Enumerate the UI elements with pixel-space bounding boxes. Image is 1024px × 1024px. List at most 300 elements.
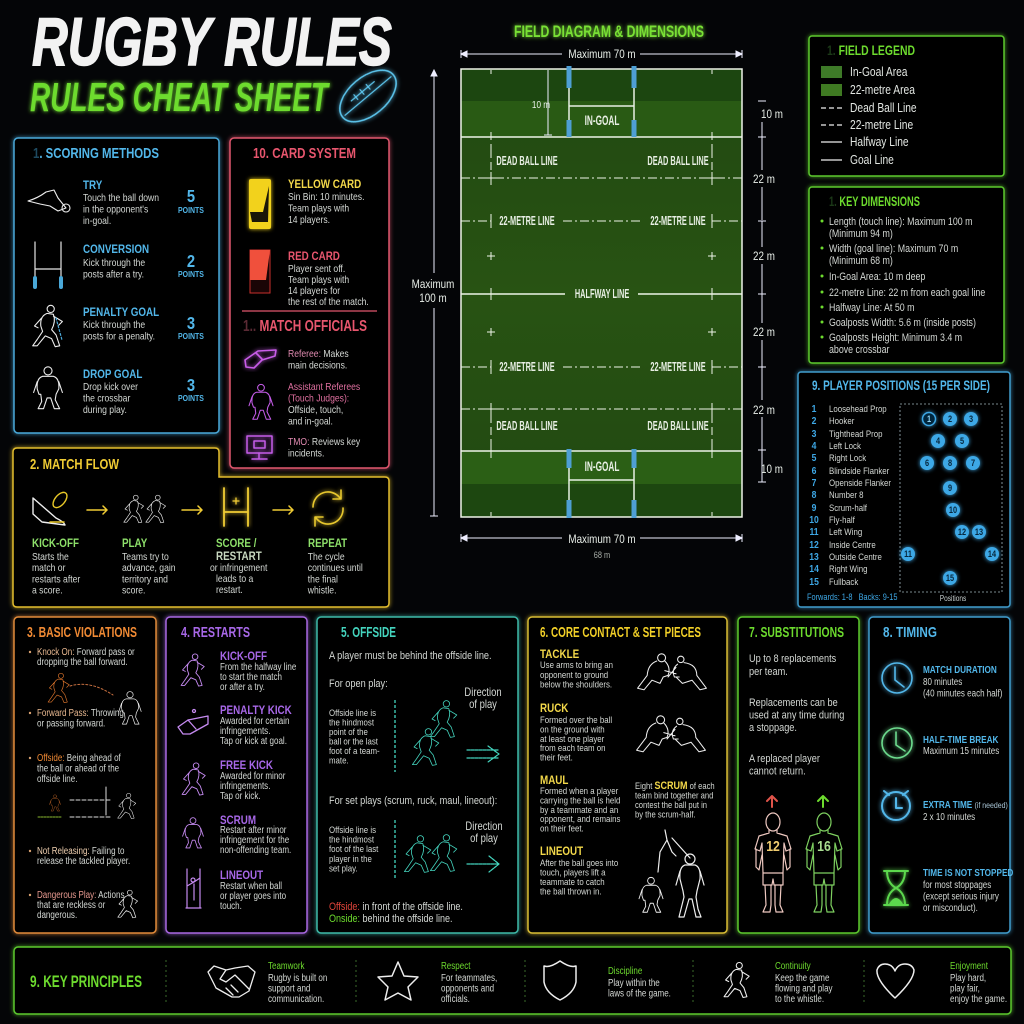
heading: key dimensions: 1. KEY DIMENSIONS [829, 194, 920, 209]
title: RUGBY RULES [32, 4, 392, 80]
formation map: 4 [936, 436, 940, 446]
icon: kick-off [181, 654, 204, 686]
title [30, 4, 392, 120]
legend items: Dead Ball Line [850, 102, 917, 115]
points: conversion: POINTS [178, 269, 204, 279]
item: try: in the opponent's [83, 204, 148, 216]
item: time not stopped: or misconduct). [923, 902, 978, 913]
direction label: set plays: of play [470, 832, 499, 845]
item: lineout: touch, players lift a [540, 867, 606, 878]
step: kick-off: a score. [32, 585, 63, 597]
illustration: dangerous play [118, 890, 138, 918]
position list: Right Wing [829, 563, 868, 574]
item: penalty goal [83, 306, 159, 343]
position list: 7 [812, 477, 816, 489]
dimension: right side: 22 m [753, 404, 775, 417]
dimension: length: 100 m [419, 292, 447, 305]
position list: Loosehead Prop [829, 403, 887, 414]
in-goal dimension mark [532, 70, 552, 135]
item: discipline: Play within the [608, 977, 660, 988]
position list: 4 [812, 440, 817, 452]
formation map: 9 [948, 483, 952, 493]
legend items: Goal Line [850, 154, 894, 167]
item: kick-off: From the halfway line [220, 661, 296, 672]
item: maul: opponent, and remains [540, 813, 621, 824]
dimension: width bottom [461, 533, 742, 560]
position footer: Forwards: 1-8 Backs: 9-15 [807, 592, 898, 602]
item: scrum: SCRUM [220, 814, 256, 827]
offside note: set plays: set play. [329, 863, 358, 874]
position list: 3 [812, 428, 816, 440]
item: lineout [220, 869, 286, 911]
offside intro [329, 650, 492, 690]
step: repeat: REPEAT [308, 537, 347, 550]
arrow [273, 506, 293, 514]
item: scrum: Eight SCRUM of each [635, 780, 715, 792]
formation map: 5 [960, 436, 964, 446]
panel: key dimensions [809, 187, 1004, 363]
list: violations [29, 646, 135, 920]
item: free kick: FREE KICK [220, 759, 273, 772]
field labels: DEAD BALL LINE [496, 420, 558, 434]
dimensions list: In-Goal Area: 10 m deep [829, 271, 926, 283]
formation map: 15 [946, 573, 955, 583]
item: teamwork: support and [268, 983, 310, 994]
step: kick-off: match or [32, 562, 66, 574]
item: kick-off: to start the match [220, 671, 282, 682]
field diagram [412, 48, 783, 560]
item: respect: opponents and [441, 983, 494, 994]
position list [809, 403, 891, 588]
dimension: length [412, 70, 454, 516]
list: violations: Offside: Being ahead of [37, 752, 121, 763]
position list: 14 [809, 563, 819, 575]
text: substitutions rules: used at any time during [749, 710, 845, 722]
position list: Number 8 [829, 489, 864, 500]
icon: half-time clock [882, 728, 912, 758]
position list: Hooker [829, 415, 854, 426]
step: repeat: whistle. [307, 585, 336, 597]
text: substitutions rules: A replaced player [749, 753, 820, 765]
item: tackle: Use arms to bring an [540, 659, 613, 670]
item: red card: RED CARD [288, 250, 340, 263]
icon: play [124, 495, 166, 523]
item: half-time break [923, 734, 1000, 756]
formation map [900, 404, 1002, 592]
item: teamwork: Teamwork [268, 960, 305, 971]
item: red card: the rest of the match. [288, 296, 369, 308]
step: play: advance, gain [122, 562, 176, 574]
panel: substitutions [738, 617, 859, 933]
heading: field legend: 1. FIELD LEGEND [827, 43, 915, 58]
offside note: open play: foot of a team- [329, 745, 380, 756]
points: conversion: 2 [187, 252, 195, 271]
item: ruck: on the ground with [540, 724, 605, 735]
item: continuity [775, 960, 833, 1004]
item: TMO: incidents. [288, 448, 324, 460]
heading: core contact: 6. CORE CONTACT & SET PIECES [540, 624, 701, 641]
figures: open play [412, 701, 457, 765]
list: violations: dangerous. [37, 909, 77, 920]
item: kick-off: KICK-OFF [220, 650, 267, 663]
offside line: open play [394, 700, 396, 772]
panel: field legend [809, 36, 1004, 176]
arrow: set plays [467, 856, 499, 872]
dimensions list [820, 216, 986, 356]
item: yellow card: Sin Bin: 10 minutes. [288, 191, 365, 203]
heading: offside: 5. OFFSIDE [341, 624, 396, 641]
arrow: off [767, 796, 777, 807]
formation map: 8 [948, 458, 952, 468]
step: score or restart [210, 537, 268, 596]
arrow: on [818, 796, 828, 807]
position list: Outside Centre [829, 551, 882, 562]
position list: 6 [812, 465, 816, 477]
icon: conversion [35, 242, 61, 287]
heading: basic violations: 3. BASIC VIOLATIONS [27, 624, 137, 641]
formation map: 14 [988, 549, 997, 559]
item: yellow card: YELLOW CARD [288, 178, 361, 191]
points: try: POINTS [178, 205, 204, 215]
icon: lineout [186, 869, 201, 908]
icon: match duration clock [882, 663, 912, 693]
item: ruck: at least one player [540, 733, 604, 744]
item: maul: MAUL [540, 774, 569, 787]
item: tackle: below the shoulders. [540, 679, 612, 690]
pitch surface [461, 69, 742, 517]
step: kick-off: restarts after [32, 574, 81, 586]
item: try [83, 179, 159, 227]
item: continuity: to the whistle. [775, 993, 824, 1004]
position list: Blindside Flanker [829, 465, 889, 476]
points: penalty goal: POINTS [178, 331, 204, 341]
step: play: PLAY [122, 537, 148, 550]
item: red card [288, 250, 369, 308]
step: kick-off: Starts the [32, 551, 69, 563]
item: respect [441, 960, 497, 1004]
item: red card: 14 players for [288, 285, 341, 297]
list: violations: Dangerous Play: Actions [37, 889, 124, 900]
step: score or restart: leads to a [216, 573, 253, 585]
item: lineout: the ball thrown in. [540, 886, 602, 897]
item: scrum: contest the ball put in [635, 799, 707, 810]
offside note: open play: Offside line is [329, 707, 376, 718]
offside set plays heading: For set plays (scrum, ruck, maul, lineout): [329, 795, 497, 807]
item: kick-off [220, 650, 296, 692]
field labels [496, 114, 709, 475]
in-goal dimension mark: 10 m [532, 99, 550, 110]
item: penalty goal: posts for a penalty. [83, 331, 155, 343]
list: violations: the ball or ahead of the [37, 763, 119, 774]
item: free kick: infringements. [220, 780, 270, 791]
icon: shield [544, 961, 576, 1000]
figures: set plays [404, 835, 457, 872]
icon: TMO screen [247, 436, 272, 459]
formation map: 6 [925, 458, 929, 468]
dimension: right side: 22 m [753, 173, 775, 186]
item: match duration [923, 664, 1002, 699]
item: time not stopped [923, 867, 1014, 913]
player off: 12: 12 [766, 838, 780, 854]
item: lineout: touch. [220, 900, 242, 911]
direction label: open play: Direction [464, 686, 502, 699]
item: free kick [220, 759, 285, 801]
list: violations: dropping the ball forward. [37, 656, 128, 667]
position list: Left Lock [829, 440, 861, 451]
item: conversion: Kick through the [83, 257, 145, 269]
points: try [178, 187, 204, 215]
dimension: width bottom: Maximum 70 m [568, 533, 636, 546]
offside note: open play: point of the [329, 726, 368, 737]
icon: kick-off [33, 490, 70, 525]
step: repeat: The cycle [308, 551, 345, 563]
dimensions list: (Minimum 94 m) [829, 228, 893, 240]
item: try: TRY [83, 179, 103, 192]
dimension: right side: 22 m [753, 250, 775, 263]
dimension: right side: 10 m [761, 463, 783, 476]
item: conversion: posts after a try. [83, 269, 144, 281]
item: drop goal: the crossbar [83, 393, 131, 405]
position list: 11 [810, 526, 819, 538]
position list: 2 [812, 415, 816, 427]
item: yellow card: Team plays with [288, 203, 349, 215]
item: enjoyment: enjoy the game. [950, 993, 1007, 1004]
item: maul: on their feet. [540, 823, 584, 834]
list: violations: Not Releasing: Failing to [37, 845, 124, 856]
icon: goal posts [224, 488, 248, 526]
item: TMO: TMO: Reviews key [288, 436, 360, 448]
item: penalty kick [220, 704, 292, 746]
step: play: territory and [122, 574, 168, 586]
item: discipline [608, 965, 671, 999]
dimension: length: Maximum [412, 278, 454, 291]
panel: player positions [798, 372, 1010, 607]
heading: scoring methods: 1. SCORING METHODS [33, 145, 159, 162]
position list: Fly-half [829, 514, 855, 525]
field labels: 22-METRE LINE [499, 361, 555, 375]
item: discipline: laws of the game. [608, 988, 671, 999]
dimensions list: Goalposts Width: 5.6 m (inside posts) [829, 317, 976, 329]
item: assistant referees: (Touch Judges): [288, 393, 349, 405]
legend items: Halfway Line [850, 136, 909, 149]
dimension: right side: 10 m [761, 108, 783, 121]
item: enjoyment [950, 960, 1007, 1004]
offside note: open play: mate. [329, 755, 349, 766]
panel: offside [317, 617, 518, 933]
offside note: set plays: the hindmost [329, 834, 375, 845]
icon: red card [250, 250, 270, 293]
icon: try [28, 190, 70, 212]
item: time not stopped: TIME IS NOT STOPPED [923, 867, 1014, 878]
item: teamwork [268, 960, 327, 1004]
item: penalty kick: Tap or kick at goal. [220, 735, 287, 746]
item: half-time break: Maximum 15 minutes [923, 745, 1000, 756]
points: drop goal: POINTS [178, 393, 204, 403]
icon: assistant referee [249, 384, 273, 419]
field labels: IN-GOAL [585, 114, 619, 129]
item: match duration: (40 minutes each half) [923, 688, 1002, 699]
dimension: right side [753, 101, 783, 482]
heading: timing: 8. TIMING [883, 624, 937, 641]
formation map: 10 [949, 505, 958, 515]
item: yellow card [288, 178, 365, 226]
position list: 5 [812, 452, 817, 464]
step: repeat: continues until [308, 562, 363, 574]
item: respect: Respect [441, 960, 471, 971]
item: penalty goal: PENALTY GOAL [83, 306, 159, 319]
heading: substitutions: 7. SUBSTITUTIONS [749, 624, 844, 641]
item: penalty goal: Kick through the [83, 319, 145, 331]
item: lineout: or player goes into [220, 890, 286, 901]
item: drop goal: DROP GOAL [83, 368, 143, 381]
item: enjoyment: Enjoyment [950, 960, 988, 971]
offside definition: Offside: in front of the offside line. [329, 901, 463, 913]
heading: restarts: 4. RESTARTS [181, 624, 250, 641]
icon: ruck figures [637, 716, 705, 752]
step: repeat: the final [308, 574, 338, 586]
dimensions list: (Minimum 68 m) [829, 255, 893, 267]
dimensions list: Width (goal line): Maximum 70 m [829, 243, 958, 255]
player on: 16: 16 [817, 838, 831, 854]
legend items: 22-metre Area [850, 84, 915, 97]
icon: heart [877, 964, 914, 998]
item: half-time break: HALF-TIME BREAK [923, 734, 999, 745]
position footer: Positions [940, 593, 967, 603]
position list: 9 [812, 502, 816, 514]
legend items [821, 66, 917, 167]
dimension: width bottom: 68 m [594, 550, 610, 560]
formation map: 12 [958, 527, 967, 537]
heading: match flow: 2. MATCH FLOW [30, 456, 120, 473]
item: ruck: Formed over the ball [540, 714, 612, 725]
list: violations: Knock On: Forward pass or [37, 646, 135, 657]
offside definition: Onside: [329, 913, 360, 925]
item: try: Touch the ball down [83, 192, 159, 204]
item: enjoyment: play fair, [950, 983, 980, 994]
offside note: open play: the hindmost [329, 717, 375, 728]
offside note: set plays: player in the [329, 853, 372, 864]
field labels: HALFWAY LINE [575, 288, 629, 302]
text: substitutions rules: Up to 8 replacements [749, 653, 836, 665]
item: teamwork: communication. [268, 993, 324, 1004]
item: respect: For teammates, [441, 972, 497, 983]
step: score or restart: SCORE / [216, 537, 256, 550]
item: scrum: Restart after minor [220, 824, 286, 835]
item: assistant referees: Assistant Referees [288, 381, 360, 393]
position list: 15 [809, 576, 819, 588]
player on: 16 [806, 813, 842, 912]
item: yellow card: 14 players. [288, 214, 330, 226]
step: play: Teams try to [122, 551, 169, 563]
heading: match officials: 1.. MATCH OFFICIALS [243, 318, 367, 335]
position list: 8 [812, 489, 817, 501]
icon: tackle figures [638, 654, 706, 690]
item: match duration: MATCH DURATION [923, 664, 997, 675]
item: assistant referees: Offside, touch, [288, 404, 343, 416]
icon: free kick [182, 763, 205, 795]
dimensions list: above crossbar [829, 344, 890, 356]
panel: restarts [166, 617, 307, 933]
offside note: set plays: foot of the last [329, 843, 379, 854]
legend items: 22-metre Line [850, 119, 913, 132]
step: score or restart: restart. [216, 584, 243, 596]
icon: repeat cycle [313, 490, 343, 526]
field labels: IN-GOAL [585, 460, 619, 475]
item: lineout: LINEOUT [220, 869, 263, 882]
item: extra time: 2 x 10 minutes [923, 811, 976, 822]
item: tackle: opponent to ground [540, 669, 608, 680]
offside note: open play: ball or the last [329, 736, 378, 747]
icon: yellow card [249, 179, 271, 229]
panel: basic violations [14, 617, 156, 933]
formation map: 11 [904, 549, 912, 559]
list: violations: that are reckless or [37, 899, 105, 910]
panel: scoring methods [14, 138, 219, 433]
icon: rugby ball [331, 60, 405, 132]
arrow [87, 506, 107, 514]
item: maul: by a teammate and an [540, 804, 618, 815]
item: free kick: Tap or kick. [220, 790, 261, 801]
points: conversion [178, 252, 204, 279]
item: tackle: TACKLE [540, 648, 579, 661]
dimension: right side: 22 m [753, 326, 775, 339]
item: enjoyment: Play hard, [950, 972, 986, 983]
item: drop goal: Drop kick over [83, 381, 138, 393]
illustration: offside [38, 787, 136, 819]
field labels: 22-METRE LINE [650, 361, 706, 375]
legend items: In-Goal Area [850, 66, 908, 79]
item: conversion: CONVERSION [83, 243, 149, 256]
arrow: open play [467, 746, 499, 762]
in-goal shading [461, 69, 742, 517]
position list: Left Wing [829, 526, 862, 537]
icon: lineout figures [639, 830, 704, 917]
list: violations: Forward Pass: Throwing [37, 707, 124, 718]
offside note: set plays: Offside line is [329, 824, 376, 835]
position list: Openside Flanker [829, 477, 891, 488]
position list: Fullback [829, 576, 859, 587]
item: scrum: team bind together and [635, 790, 714, 801]
item: continuity: flowing and play [775, 983, 833, 994]
position list: Inside Centre [829, 539, 876, 550]
item: time not stopped: (except serious injury [923, 891, 999, 902]
item: ruck: RUCK [540, 702, 568, 715]
position list: Right Lock [829, 452, 867, 463]
item: teamwork: Rugby is built on [268, 972, 327, 983]
item: scrum [220, 814, 291, 855]
illustration: forward pass [48, 673, 141, 724]
item: lineout: After the ball goes into [540, 857, 618, 868]
step: score or restart: RESTART [216, 550, 262, 563]
list: violations: offside line. [37, 773, 77, 784]
direction label: set plays: Direction [465, 820, 503, 833]
heading: card system: 10. CARD SYSTEM [253, 145, 356, 162]
position list: 1 [812, 403, 817, 415]
item: continuity: Continuity [775, 960, 811, 971]
formation map: 7 [971, 458, 975, 468]
icon: penalty kick tee [178, 710, 208, 734]
text: substitutions rules: Replacements can be [749, 697, 838, 709]
list: violations: or passing forward. [37, 718, 105, 729]
panel: card system [230, 138, 389, 468]
formation map: 2 [948, 414, 952, 424]
item: lineout: LINEOUT [540, 845, 583, 858]
item: referee: Referee: Makes [288, 348, 349, 360]
points: penalty goal: 3 [187, 314, 195, 333]
points: try: 5 [187, 187, 195, 206]
item: match duration: 80 minutes [923, 676, 962, 687]
step: repeat [307, 537, 363, 597]
